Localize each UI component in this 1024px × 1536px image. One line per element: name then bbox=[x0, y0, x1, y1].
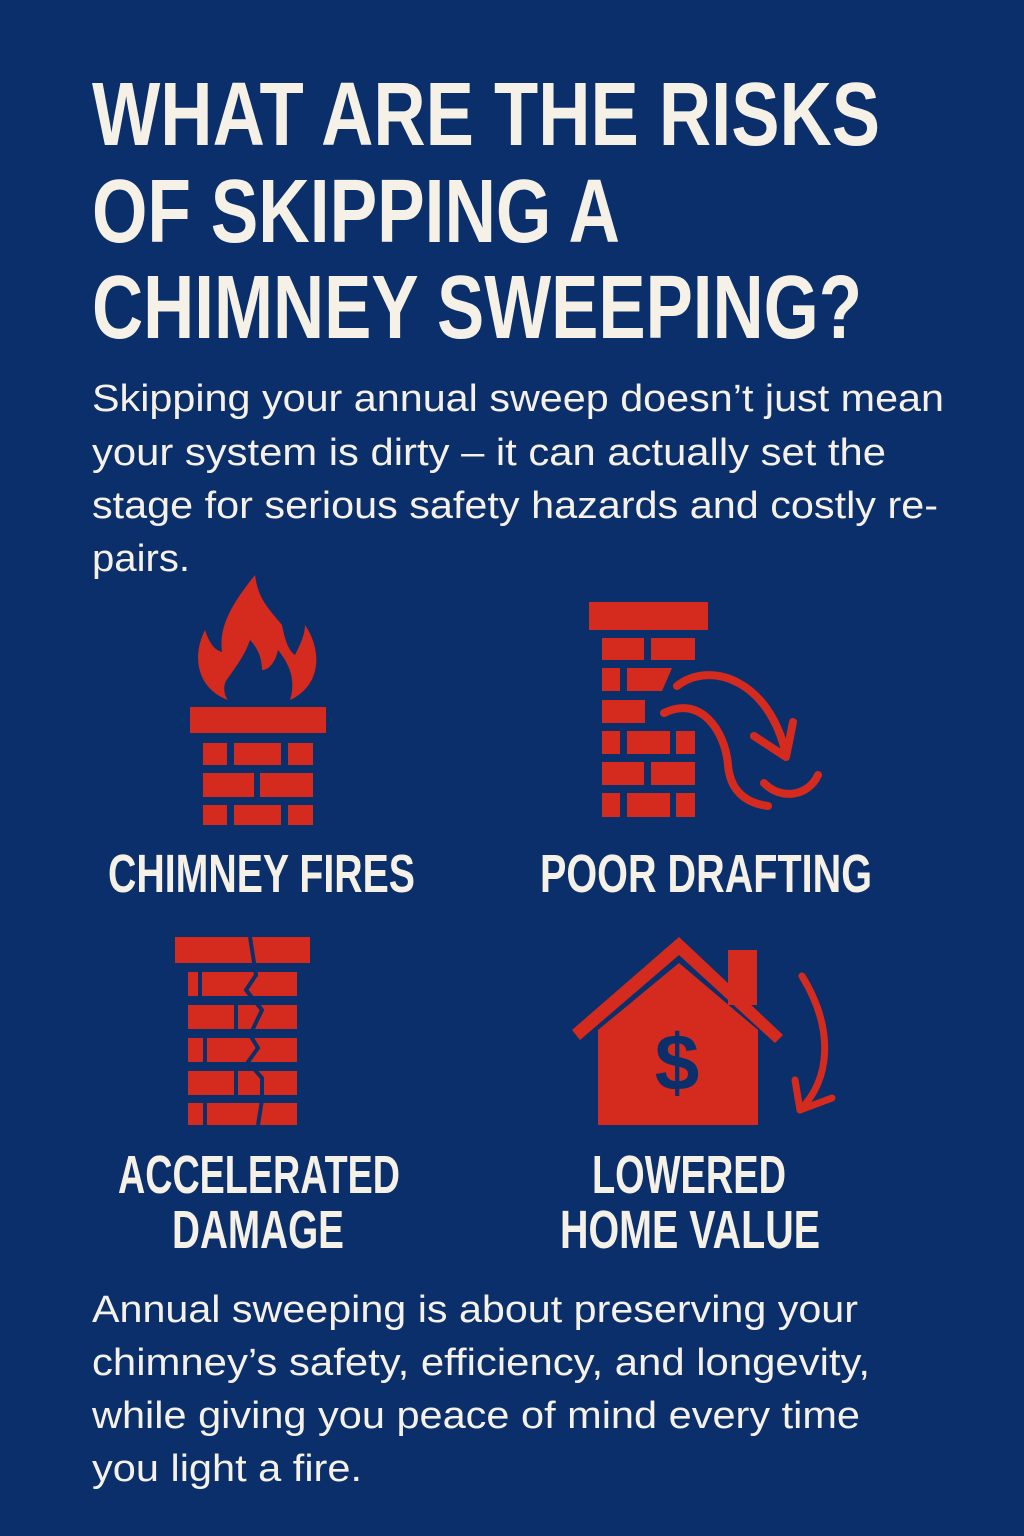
label: poor drafting: POOR DRAFTING bbox=[540, 844, 872, 904]
intro paragraph bbox=[92, 378, 944, 580]
label: chimney fires: CHIMNEY FIRES bbox=[108, 844, 415, 904]
icon: cracked chimney bbox=[175, 937, 310, 1125]
label: lowered home value: LOWERED bbox=[592, 1145, 786, 1205]
intro paragraph: Skipping your annual sweep doesn’t just mean bbox=[92, 378, 944, 420]
closing paragraph: Annual sweeping is about preserving your bbox=[92, 1289, 858, 1331]
closing paragraph: chimney’s safety, efficiency, and longevity, bbox=[92, 1342, 870, 1384]
label: lowered home value bbox=[560, 1145, 820, 1260]
icon: house value down bbox=[572, 937, 832, 1125]
icon: poor drafting chimney bbox=[589, 602, 818, 817]
intro paragraph: your system is dirty – it can actually set the bbox=[92, 432, 886, 474]
label: accelerated damage: ACCELERATED bbox=[118, 1145, 400, 1205]
label: accelerated damage: DAMAGE bbox=[172, 1200, 344, 1260]
title bbox=[92, 65, 880, 358]
closing paragraph bbox=[91, 1289, 870, 1490]
title: OF SKIPPING A bbox=[92, 162, 620, 262]
label: lowered home value: HOME VALUE bbox=[560, 1200, 820, 1260]
icon: chimney fire bbox=[190, 575, 326, 825]
intro paragraph: pairs. bbox=[92, 538, 190, 580]
closing paragraph: while giving you peace of mind every time bbox=[91, 1395, 860, 1437]
closing paragraph: you light a fire. bbox=[92, 1448, 362, 1490]
icon: house value down: $ bbox=[655, 1018, 699, 1107]
intro paragraph: stage for serious safety hazards and costly re- bbox=[92, 485, 938, 527]
label: accelerated damage bbox=[118, 1145, 400, 1260]
